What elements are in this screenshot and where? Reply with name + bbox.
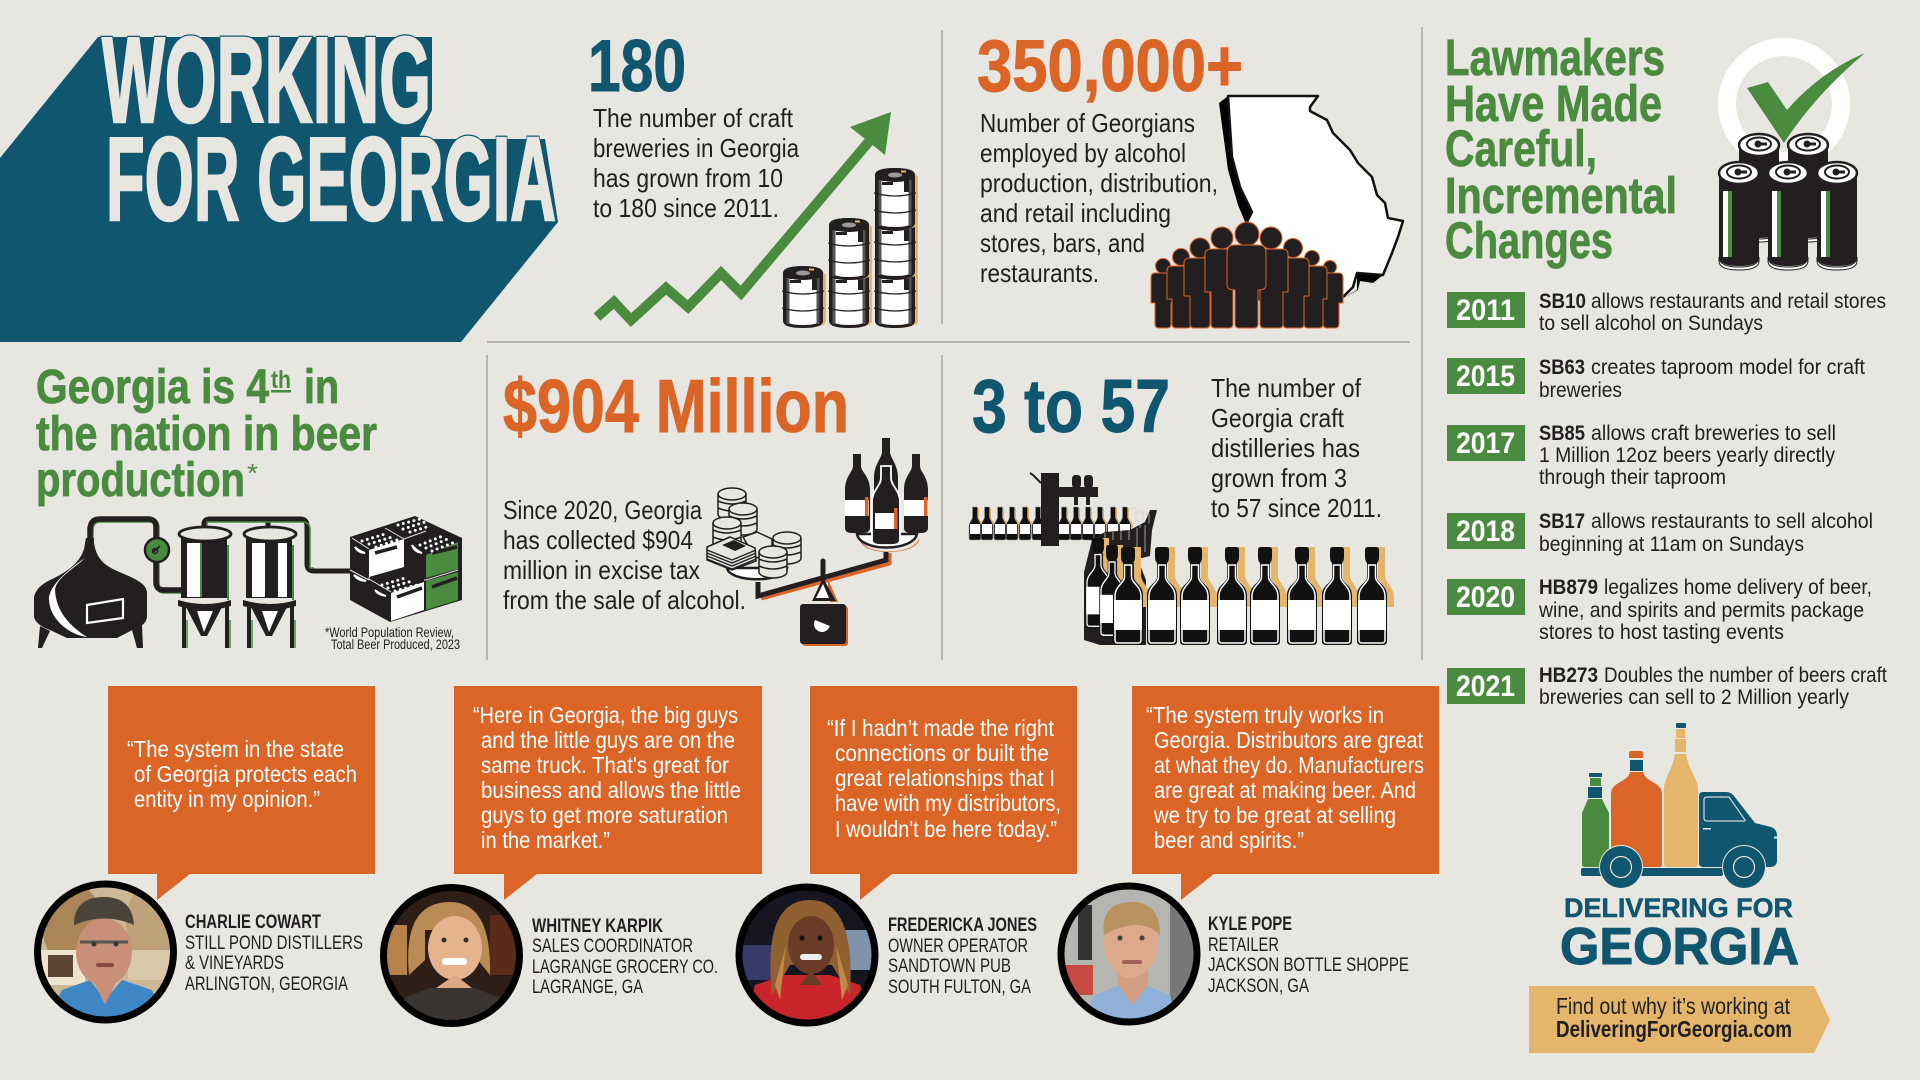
footnote: *World Population Review, [325,624,454,640]
caption: Charlie Cowart: STILL POND DISTILLERS [185,933,363,954]
text: excise tax: million in excise tax [503,555,700,585]
caption: Kyle Pope: JACKSON BOTTLE SHOPPE [1208,955,1409,976]
timeline: 2020 [1447,576,1872,644]
call to action arrow [1529,986,1830,1053]
stat: 350,000+: 350,000+ [977,26,1243,107]
title: Working for Georgia: WORKING [102,12,431,148]
caption: Whitney Karpik: SALES COORDINATOR [532,936,693,957]
quote: Whitney Karpik: guys to get more saturation [481,802,728,828]
quote: Kyle Pope: beer and spirits.” [1154,827,1304,853]
quote: Kyle Pope: at what they do. Manufacturers [1154,752,1424,778]
text: employment [980,108,1218,288]
quote: Whitney Karpik: in the market.” [481,827,610,853]
timeline: 2011: to sell alcohol on Sundays [1539,312,1763,335]
heading: Lawmakers Have Made Careful, Incremental Changes: Lawmakers [1445,29,1665,86]
call to action arrow: DeliveringForGeorgia.com [1556,1016,1792,1042]
heading: Lawmakers Have Made Careful, Incremental Changes: Careful, [1445,120,1597,177]
caption: Kyle Pope [1208,914,1409,997]
text: employment: production, distribution, [980,168,1218,198]
quote: Fredericka Jones: great relationships that I [835,765,1055,791]
quote: Fredericka Jones: I wouldn't be here today.” [835,816,1057,842]
portrait: Fredericka Jones [737,883,877,1027]
portrait: Whitney Karpik [380,884,523,1030]
text: distillery growth: to 57 since 2011. [1211,493,1382,523]
quote: Kyle Pope [1132,686,1439,900]
icon: growth arrow [597,112,891,320]
logo: Delivering for Georgia: GEORGIA [1560,918,1799,976]
quote: Kyle Pope: “The system truly works in [1146,702,1384,728]
caption: Fredericka Jones: SANDTOWN PUB [888,956,1011,977]
logo: Delivering for Georgia: DELIVERING FOR [1564,893,1793,923]
quote: Whitney Karpik [454,686,762,900]
icon: brewing equipment [34,519,351,648]
title: Working for Georgia [102,12,556,246]
timeline: 2015: SB63 [1539,356,1585,379]
icon: crowd of people [1151,222,1343,328]
icon: balance scale with money and bottles [707,438,928,646]
text: brewery growth: to 180 since 2011. [593,193,779,223]
caption: Fredericka Jones: SOUTH FULTON, GA [888,977,1031,998]
text: excise tax: has collected $904 [503,525,693,555]
text: employment: and retail including [980,198,1171,228]
icon: keg stacks [782,168,918,328]
quote: Fredericka Jones [810,686,1077,900]
caption: Whitney Karpik [532,916,718,998]
timeline: 2015 [1447,356,1865,402]
icon: bottling line [969,473,1394,645]
quote: Fredericka Jones: “If I hadn’t made the right [827,715,1055,741]
timeline: 2018: allows restaurants to sell alcohol [1591,510,1873,533]
text: employment: restaurants. [980,258,1099,288]
footnote: Total Beer Produced, 2023 [331,636,460,652]
caption: Charlie Cowart [185,912,363,995]
timeline: 2015: breweries [1539,379,1622,402]
portrait: Kyle Pope [1058,883,1200,1025]
text: excise tax [503,495,746,615]
caption: Kyle Pope: KYLE POPE [1208,914,1292,935]
text: distillery growth [1211,373,1382,523]
timeline: 2017: SB85 [1539,422,1585,445]
stat: 180: 180 [588,26,686,107]
text: distillery growth: The number of [1211,373,1362,403]
panel: lawmakers timeline [1445,29,1887,709]
panel: Georgia is 4th in beer production [34,361,462,652]
logo: Delivering for Georgia [1560,723,1799,976]
title: Working for Georgia: FOR GEORGIA [106,113,556,246]
heading: Lawmakers Have Made Careful, Incremental Changes: Incremental [1445,167,1677,224]
timeline: 2020: wine, and spirits and permits package [1538,599,1864,622]
heading: Lawmakers Have Made Careful, Incremental Changes: Changes [1445,212,1613,269]
timeline: 2018 [1447,510,1873,556]
panel: 350,000+ jobs [977,26,1403,328]
text: employment: Number of Georgians [980,108,1195,138]
timeline: 2015: 2015 [1456,360,1515,393]
caption: Fredericka Jones: OWNER OPERATOR [888,936,1028,957]
timeline: 2021: 2021 [1456,670,1515,703]
quote: Fredericka Jones: have with my distributors, [835,790,1061,816]
divider lines [487,27,1422,660]
heading: 4th in the nation: Georgia is 4 [36,361,269,414]
heading: 4th in the nation: the nation in beer [36,408,377,461]
caption: Whitney Karpik: WHITNEY KARPIK [532,916,663,937]
timeline: 2017: 1 Million 12oz beers yearly directly [1539,444,1835,467]
icon: stacked crates [350,516,462,622]
timeline: 2011 [1447,290,1886,335]
timeline: 2011: allows restaurants and retail stores [1591,290,1886,313]
timeline: 2020: stores to host tasting events [1539,621,1784,644]
timeline: 2020: legalizes home delivery of beer, [1604,576,1872,599]
caption: Whitney Karpik: LAGRANGE, GA [532,977,643,998]
quote: Whitney Karpik: and the little guys are on the [481,727,735,753]
text: excise tax: from the sale of alcohol. [503,585,746,615]
text: distillery growth: distilleries has [1211,433,1360,463]
caption: Kyle Pope: RETAILER [1208,935,1279,956]
timeline: 2021: Doubles the number of beers craft [1604,664,1887,687]
text: brewery growth: The number of craft [593,103,794,133]
text: distillery growth: Georgia craft [1211,403,1345,433]
caption: Charlie Cowart: & VINEYARDS [185,953,284,974]
quote: Whitney Karpik: business and allows the little [481,777,741,803]
text: excise tax: Since 2020, Georgia [503,495,702,525]
tank 2 [243,527,296,648]
caption: Fredericka Jones: FREDERICKA JONES [888,915,1037,936]
heading: 4th in the nation: * [247,458,258,488]
heading: 4th in the nation: th [271,366,291,394]
timeline: 2011: SB10 [1539,290,1586,313]
text: employment: stores, bars, and [980,228,1145,258]
tank 1 [178,527,231,648]
text: brewery growth [593,103,799,223]
heading: 4th in the nation: in [304,361,339,414]
caption: Charlie Cowart: CHARLIE COWART [185,912,321,933]
quote: Whitney Karpik: “Here in Georgia, the big guys [473,702,738,728]
panel: 3 to 57 distilleries [969,364,1394,645]
heading: Lawmakers Have Made Careful, Incremental Changes [1445,29,1677,269]
bottles on scale [845,438,928,545]
call to action arrow: Find out why it’s working at [1556,993,1791,1019]
timeline: 2021: breweries can sell to 2 Million yearly [1539,686,1849,709]
timeline: 2017 [1447,422,1836,489]
title banner [0,12,558,342]
caption: Kyle Pope: JACKSON, GA [1208,976,1309,997]
heading: Lawmakers Have Made Careful, Incremental Changes: Have Made [1445,75,1662,132]
timeline: 2011: 2011 [1456,294,1515,327]
quote: Charlie Cowart: “The system in the state [127,736,344,762]
timeline: 2017: allows craft breweries to sell [1591,422,1836,445]
timeline: 2021 [1447,664,1887,709]
title: Working for Georgia: WORKING [102,12,431,148]
quote: Kyle Pope: are great at making beer. And [1154,777,1416,803]
timeline: 2017: 2017 [1456,427,1515,460]
quote: Whitney Karpik: same truck. That's great for [481,752,729,778]
quote: Fredericka Jones: connections or built the [835,740,1049,766]
timeline: 2017: through their taproom [1539,466,1726,489]
icon: check mark and cans [1719,47,1865,270]
caption: Whitney Karpik: LAGRANGE GROCERY CO. [532,957,718,978]
timeline: 2021: HB273 [1539,664,1598,687]
timeline: 2015: creates taproom model for craft [1591,356,1865,379]
caption: Fredericka Jones [888,915,1037,998]
timeline: 2018: beginning at 11am on Sundays [1539,533,1804,556]
caption: Charlie Cowart: ARLINGTON, GEORGIA [185,974,348,995]
quote: Charlie Cowart [108,686,375,900]
title: Working for Georgia: FOR GEORGIA [106,113,556,246]
icon: Georgia map [1219,96,1403,300]
timeline: 2018: 2018 [1456,515,1515,548]
heading: 4th in the nation: production [36,454,245,507]
timeline: 2020: 2020 [1456,581,1515,614]
icon: bottle truck [1581,723,1777,889]
quote: Charlie Cowart: of Georgia protects each [134,761,357,787]
quote: Kyle Pope: Georgia. Distributors are great [1154,727,1424,753]
stat: $904 Million: $904 Million [503,364,849,448]
quote: Charlie Cowart: entity in my opinion.” [134,786,320,812]
text: brewery growth: has grown from 10 [593,163,783,193]
text: employment: employed by alcohol [980,138,1186,168]
timeline: 2018: SB17 [1539,510,1585,533]
heading: 4th in the nation [36,361,377,507]
panel: 180 craft breweries [588,26,918,328]
stat: 3 to 57: 3 to 57 [972,364,1170,448]
text: brewery growth: breweries in Georgia [593,133,799,163]
quote: Kyle Pope: we try to be great at selling [1153,802,1396,828]
portrait: Charlie Cowart [35,881,176,1023]
footnote [325,624,460,652]
text: distillery growth: grown from 3 [1211,463,1347,493]
timeline: 2020: HB879 [1539,576,1598,599]
panel: $904 Million [503,364,928,646]
